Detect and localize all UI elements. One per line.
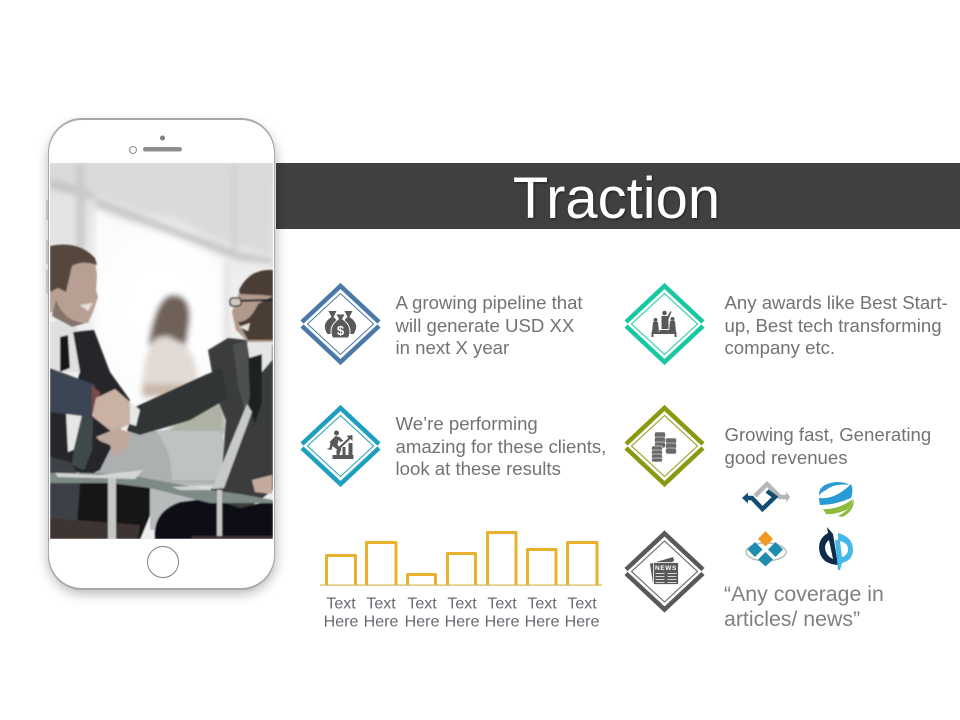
left man shirt <box>50 321 81 374</box>
icon badge: running up growth chart <box>302 408 379 484</box>
logo: globe swirl <box>819 482 854 517</box>
left man head <box>50 262 99 324</box>
phone home button <box>148 546 178 578</box>
right man shirt <box>247 338 272 372</box>
phone speaker <box>143 147 182 152</box>
title: Traction <box>514 167 721 232</box>
phone mockup <box>46 118 276 594</box>
bar labels: Here <box>405 614 439 630</box>
bar labels: Here <box>525 614 559 630</box>
bar labels: Text <box>366 596 396 612</box>
bar labels: Here <box>565 614 599 630</box>
couch <box>92 428 226 483</box>
text block: clients: We’re performing <box>396 413 538 434</box>
bar labels: Here <box>364 614 398 630</box>
laptop <box>212 404 252 489</box>
icon badge: money bags <box>302 286 379 362</box>
bar labels: Here <box>485 614 519 630</box>
icon: runner and bars <box>326 430 354 459</box>
bar labels <box>324 596 599 630</box>
text block: revenues: Growing fast, Generating <box>724 424 931 445</box>
left man tie <box>60 335 70 372</box>
icon: podium figures <box>652 311 676 337</box>
phone sensor dot <box>160 136 165 140</box>
text block: awards: Any awards like Best Start- <box>724 292 948 313</box>
left man shirt below sleeve <box>66 412 82 452</box>
hands <box>92 389 130 432</box>
logo: diamonds <box>746 531 786 566</box>
bar labels: Text <box>447 596 477 612</box>
bar labels: Here <box>445 614 479 630</box>
bar labels: Here <box>324 614 358 630</box>
photo: business handshake <box>50 163 273 539</box>
right man arm <box>127 368 228 435</box>
bar labels: Text <box>326 596 356 612</box>
left man knee <box>50 457 81 521</box>
right man suit <box>205 338 273 515</box>
text block: pipeline: in next X year <box>396 337 509 358</box>
text block: clients: amazing for these clients, <box>396 436 606 457</box>
icon: newspaper: NEWS <box>655 565 677 572</box>
logo: arrows <box>742 484 790 509</box>
icon badge: award podium <box>626 286 703 362</box>
text block: pipeline: A growing pipeline that <box>396 292 583 313</box>
legs and table <box>76 483 150 539</box>
left sleeve <box>50 368 95 417</box>
right man head <box>231 292 273 343</box>
text block: awards: company etc. <box>724 337 835 358</box>
shirt cuff <box>129 401 140 426</box>
phone camera <box>130 146 136 154</box>
right man tie <box>248 354 262 424</box>
left man lining <box>72 415 93 470</box>
text block: clients: look at these results <box>396 458 561 479</box>
icon: money bags: $ <box>337 323 345 338</box>
bar labels: Text <box>487 596 517 612</box>
bar labels: Text <box>567 596 597 612</box>
icon badge: newspaper <box>626 534 703 610</box>
text block: pipeline: will generate USD XX <box>394 315 575 336</box>
text block: coverage quote: “Any coverage in <box>724 582 884 606</box>
bar labels: Text <box>527 596 557 612</box>
text block: coverage quote: articles/ news” <box>724 607 860 631</box>
icon: coins <box>652 432 676 462</box>
logo: crescent <box>819 527 853 570</box>
title: Traction <box>513 166 720 231</box>
bar chart <box>320 532 602 630</box>
icon badge: coin stacks <box>626 408 703 484</box>
header banner <box>276 163 960 229</box>
bar labels: Text <box>407 596 437 612</box>
left man jacket <box>50 330 130 475</box>
text block: awards: up, Best tech transforming <box>724 315 942 336</box>
text block: revenues: good revenues <box>724 447 848 468</box>
